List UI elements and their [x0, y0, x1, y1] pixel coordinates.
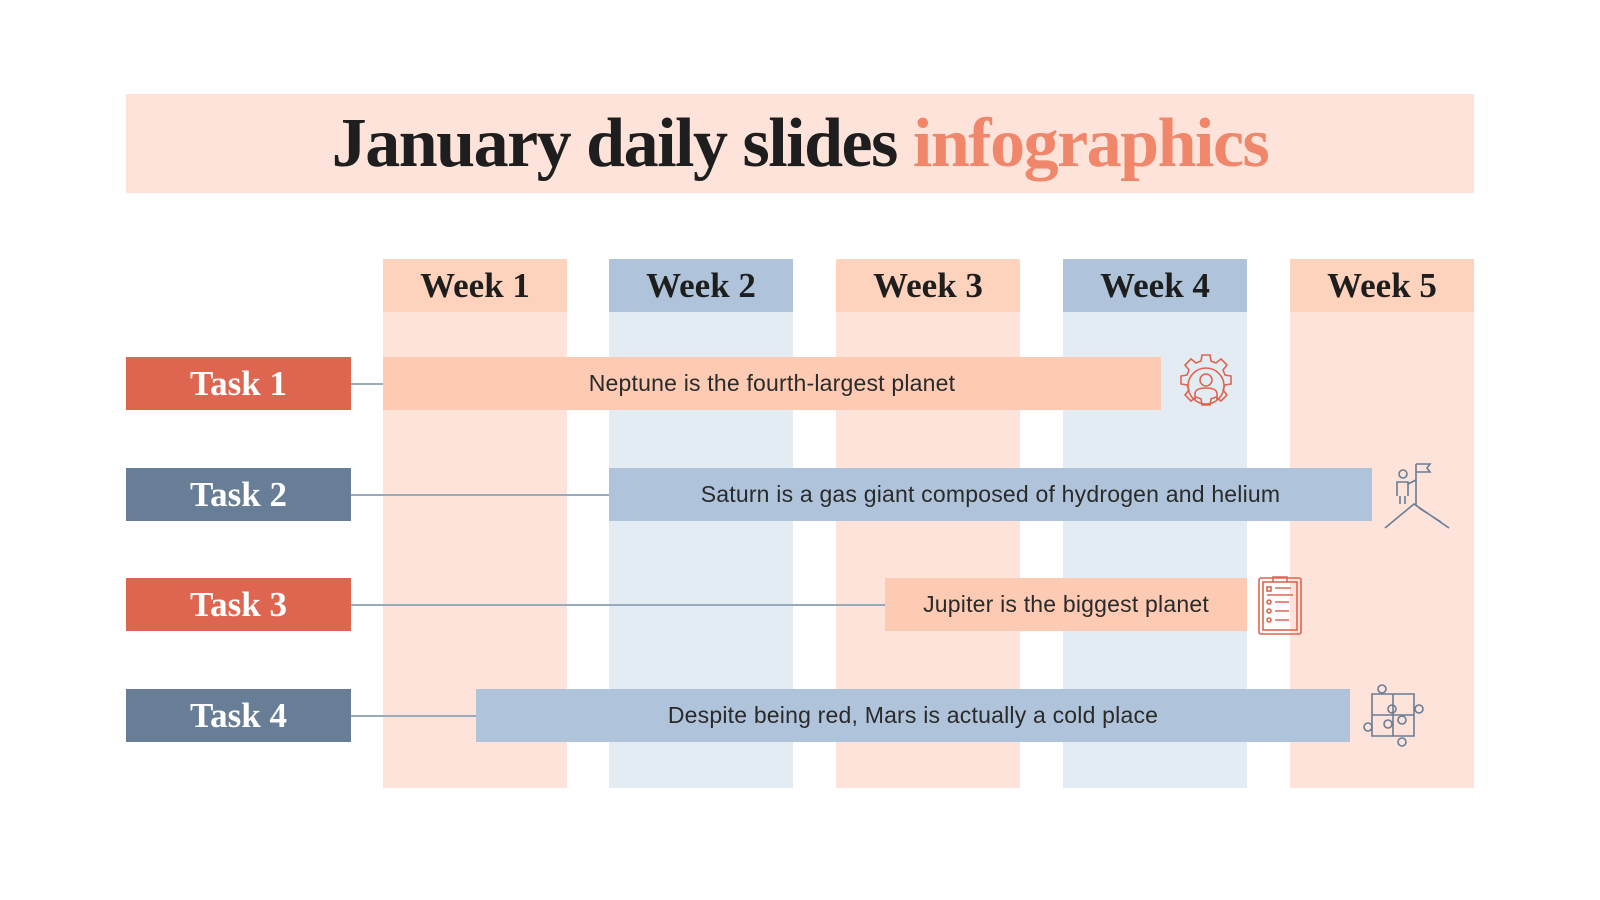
task 2 label: [126, 468, 351, 521]
column: week 1: Week 1: [420, 266, 530, 305]
bar task 3: [885, 578, 1247, 631]
bar task 2: [609, 468, 1372, 521]
task 1 label: [126, 357, 351, 410]
task 3 label: Task 3: [190, 585, 287, 624]
task 3 label: [126, 578, 351, 631]
icon: climber with flag: [1384, 463, 1450, 528]
title banner: [126, 94, 1474, 193]
column: week 2: [609, 259, 793, 788]
task 2 label: Task 2: [190, 475, 287, 514]
bar task 4: [476, 689, 1350, 742]
column: week 4: [1063, 259, 1247, 788]
column: week 3: Week 3: [873, 266, 983, 305]
title banner: January daily slides infographics: [332, 105, 1268, 182]
column: week 2: Week 2: [646, 266, 756, 305]
task 1 label: Task 1: [190, 364, 287, 403]
column: week 5: [1290, 259, 1474, 788]
bar task 1: [383, 357, 1161, 410]
task 4 label: Task 4: [190, 696, 287, 735]
column: week 3: [836, 259, 1020, 788]
bar task 3: Jupiter is the biggest planet: [923, 591, 1209, 617]
icon: gear person: [1180, 354, 1232, 406]
column: week 4: Week 4: [1100, 266, 1210, 305]
connector lines: [351, 360, 1225, 717]
column: week 1: [383, 259, 567, 788]
task 4 label: [126, 689, 351, 742]
bar task 4: Despite being red, Mars is actually a cold place: [668, 702, 1158, 728]
bar task 2: Saturn is a gas giant composed of hydrogen and helium: [701, 481, 1280, 507]
bar task 1: Neptune is the fourth-largest planet: [589, 370, 955, 396]
column: week 5: Week 5: [1327, 266, 1437, 305]
icon: clipboard: [1258, 576, 1302, 635]
icon: puzzle: [1363, 684, 1424, 747]
